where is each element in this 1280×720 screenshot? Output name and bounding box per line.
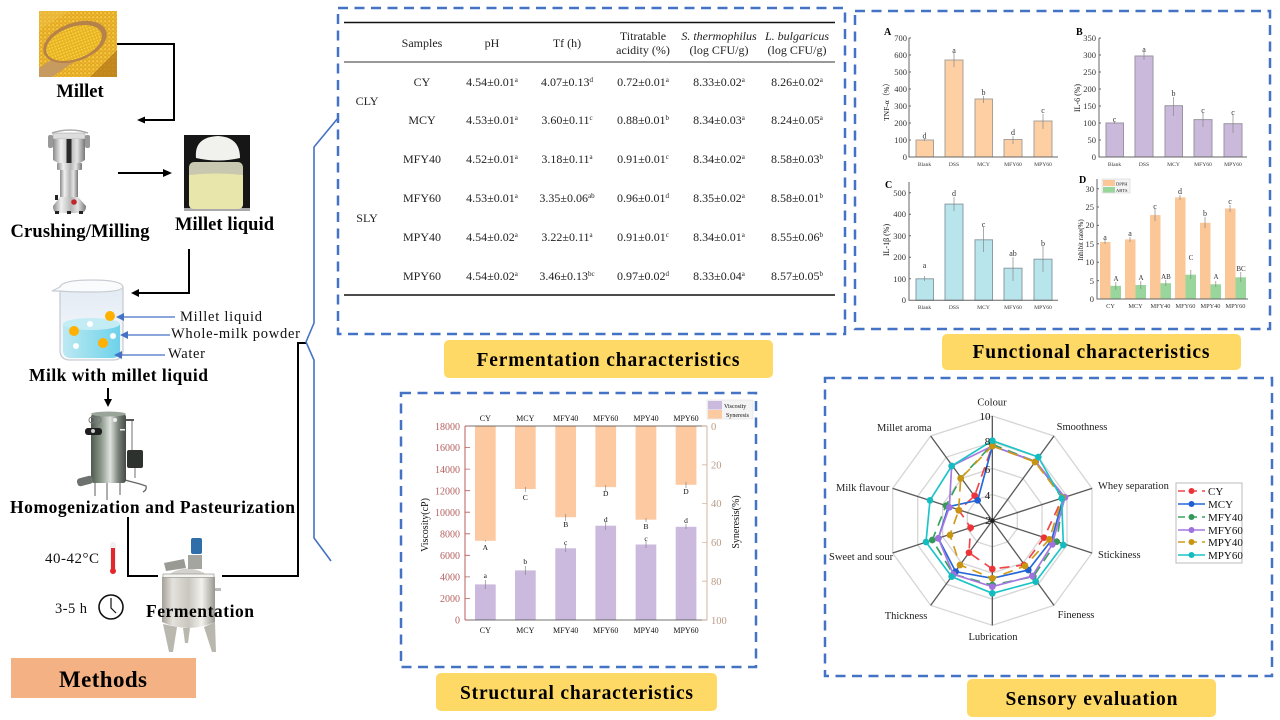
- chart C: IL-1 beta: MPY60: [1034, 305, 1052, 311]
- table body: 3.60±0.11: [541, 113, 590, 127]
- significance letters: D: [683, 487, 689, 496]
- table body: b: [666, 114, 670, 122]
- chart D: inhibit rate: d: [1178, 187, 1182, 196]
- significance letters: d: [684, 516, 688, 525]
- radar chart: [893, 416, 1092, 625]
- table body: a: [590, 153, 594, 161]
- chart C: IL-1 beta: 300: [893, 231, 906, 241]
- label: Crushing/Milling: Crushing/Milling: [10, 222, 150, 242]
- label: Homogenization and Pasteurization: Homogenization and Pasteurization: [10, 497, 295, 517]
- chart D legend: DPPH: [1116, 182, 1128, 186]
- arrow: milk to homogenizer: [104, 388, 112, 407]
- chart D: inhibit rate: a: [1128, 229, 1132, 238]
- radar scale numbers: 10: [980, 411, 991, 423]
- left axis labels: 16000: [435, 443, 460, 454]
- chart D: inhibit rate: 30: [1086, 184, 1094, 194]
- chart D: inhibit rate: c: [1153, 202, 1157, 211]
- heading: Sensory evaluation: [967, 679, 1216, 717]
- table body: SLY: [356, 211, 378, 225]
- radar axis labels: Stickiness: [1098, 550, 1141, 561]
- chart A: TNF-alpha: MCY: [977, 162, 990, 168]
- chart D: inhibit rate: BC: [1236, 265, 1246, 273]
- bars: syneresis: [475, 426, 696, 541]
- sample labels: MCY: [516, 626, 535, 635]
- table body: MFY60: [403, 191, 441, 205]
- table body: b: [820, 192, 824, 200]
- table body: b: [820, 231, 824, 239]
- chart D: inhibit rate: c: [1228, 197, 1232, 206]
- left axis labels: 4000: [440, 572, 460, 584]
- significance letters: [483, 487, 689, 580]
- left axis labels: 18000: [435, 422, 460, 433]
- table body: 4.54±0.02: [466, 269, 515, 283]
- table body: b: [820, 153, 824, 161]
- right axis labels: 20: [711, 460, 722, 472]
- radar scale numbers: 2: [985, 515, 991, 527]
- sample labels: CY: [480, 414, 491, 423]
- table body: c: [590, 114, 593, 122]
- chart C: IL-1 beta: C: [885, 180, 892, 191]
- table body: 0.97±0.02: [617, 269, 666, 283]
- icon: homogenizer and pasteurizer: [76, 412, 146, 500]
- chart D: inhibit rate: 10: [1086, 257, 1094, 267]
- chart C: IL-1 beta: MCY: [977, 305, 990, 311]
- icon: thermometer: [110, 542, 116, 574]
- chart B: IL-6: 100: [1083, 118, 1096, 128]
- table body: a: [742, 114, 746, 122]
- sample labels: MCY: [516, 414, 535, 423]
- radar axis labels: Millet aroma: [877, 423, 932, 434]
- chart D: inhibit rate: a: [1103, 233, 1107, 242]
- chart D: inhibit rate: A: [1138, 274, 1144, 282]
- chart A: TNF-alpha: d: [922, 132, 926, 140]
- significance letters: b: [523, 557, 527, 566]
- chart B: IL-6: 300: [1083, 50, 1096, 60]
- table body: 4.53±0.01: [466, 191, 515, 205]
- chart D: inhibit rate: b: [1203, 209, 1207, 218]
- heading: Sensory evaluation: Sensory evaluation: [1006, 689, 1178, 710]
- table body: 8.34±0.01: [693, 230, 742, 244]
- chart B: IL-6: DSS: [1139, 162, 1149, 168]
- table body: 3.22±0.11: [541, 230, 590, 244]
- table body: c: [666, 153, 669, 161]
- chart A: TNF-alpha: A: [884, 27, 892, 38]
- callouts: beaker ingredients: Millet liquid: [180, 309, 263, 325]
- radar legend: MFY60: [1208, 525, 1243, 537]
- chart B: IL-6: IL-6 (%): [1073, 84, 1082, 112]
- chart C: IL-1 beta: 400: [893, 209, 906, 219]
- right axis labels: 100: [711, 616, 727, 627]
- chart D: inhibit rate: A: [1213, 273, 1219, 281]
- chart D: inhibit rate: 0: [1090, 294, 1094, 304]
- significance letters: d: [604, 515, 608, 524]
- radar scale numbers: [980, 411, 991, 527]
- table body: MCY: [408, 113, 436, 127]
- table body: 0.72±0.01: [617, 75, 666, 89]
- callouts: beaker ingredients: Whole-milk powder: [171, 326, 300, 342]
- chart B: IL-6: 50: [1088, 135, 1096, 145]
- table body: MFY40: [403, 152, 441, 166]
- table body: 8.35±0.02: [693, 191, 742, 205]
- significance letters: a: [484, 571, 488, 580]
- sample labels: MFY60: [593, 414, 618, 423]
- chart B: IL-6: 250: [1083, 67, 1096, 77]
- chart D: inhibit rate: CY: [1106, 303, 1115, 310]
- chart D: inhibit rate: 15: [1086, 239, 1094, 249]
- table header: acidity (%): [616, 43, 670, 57]
- significance letters: C: [523, 493, 528, 502]
- chart B: IL-6: a: [1142, 45, 1146, 54]
- table header: [402, 29, 829, 57]
- table body: 4.52±0.01: [466, 152, 515, 166]
- radar axis labels: Thickness: [885, 611, 927, 622]
- chart legend: Syneresis: [726, 413, 750, 419]
- table body: a: [590, 231, 594, 239]
- chart B: IL-6: 0: [1092, 152, 1096, 162]
- radar axis labels: Sweet and sour: [829, 552, 894, 563]
- table body: 8.33±0.02: [693, 75, 742, 89]
- table body: c: [666, 231, 669, 239]
- chart A: TNF-alpha: MPY60: [1034, 162, 1052, 168]
- table body: [356, 75, 824, 283]
- table body: a: [515, 153, 519, 161]
- table body: 4.54±0.01: [466, 75, 515, 89]
- table body: a: [742, 76, 746, 84]
- chart legend: Viscosity: [724, 404, 746, 410]
- chart B: IL-6: b: [1172, 89, 1176, 98]
- table header: Samples: [402, 36, 443, 50]
- chart B: IL-6: Blank: [1108, 162, 1121, 168]
- table header: S. thermophilus: [681, 29, 757, 43]
- panel: sensory evaluation: [825, 378, 1272, 676]
- chart B: IL-6: [1073, 27, 1247, 168]
- label: time: 3-5 h: [55, 601, 88, 617]
- arrow: millet liquid to beaker: [131, 249, 189, 297]
- chart B: IL-6: MFY60: [1194, 162, 1212, 168]
- table body: 4.54±0.02: [466, 230, 515, 244]
- chart C: IL-1 beta: 200: [893, 252, 906, 262]
- left axis labels: [435, 422, 460, 626]
- label: Fermentation: Fermentation: [146, 601, 254, 621]
- chart D: inhibit rate: AB: [1161, 273, 1171, 281]
- callouts: beaker ingredients: [114, 309, 300, 362]
- chart B: IL-6: c: [1231, 108, 1235, 117]
- sample labels: [480, 414, 699, 635]
- chart A: TNF-alpha: a: [952, 46, 956, 55]
- left axis labels: 8000: [440, 530, 460, 540]
- table header: Titratable: [620, 29, 666, 43]
- sample labels: MPY40: [633, 626, 659, 635]
- chart D: inhibit rate: D: [1079, 175, 1086, 186]
- table body: 0.88±0.01: [617, 113, 666, 127]
- table header: L. bulgaricus: [764, 29, 829, 43]
- table body: a: [515, 231, 519, 239]
- table body: a: [515, 114, 519, 122]
- axes: [465, 426, 707, 620]
- table body: 8.58±0.03: [771, 152, 820, 166]
- chart A: TNF-alpha: DSS: [949, 162, 959, 168]
- table body: a: [515, 270, 519, 278]
- chart A: TNF-alpha: b: [982, 88, 986, 97]
- chart B: IL-6: 200: [1083, 84, 1096, 94]
- heading: Functional characteristics: [942, 334, 1241, 370]
- bracket: links methods to results: [306, 118, 338, 561]
- chart A: TNF-alpha: c: [1041, 106, 1045, 115]
- chart C: IL-1 beta: Blank: [918, 305, 931, 311]
- heading: Functional characteristics: Functional characteristics: [972, 342, 1210, 363]
- chart B: IL-6: MPY60: [1224, 162, 1242, 168]
- table body: 8.26±0.02: [771, 75, 820, 89]
- table body: a: [820, 76, 824, 84]
- series: MFY40: [932, 444, 1063, 585]
- table body: 8.55±0.06: [771, 230, 820, 244]
- table body: 4.53±0.01: [466, 113, 515, 127]
- table body: 8.34±0.03: [693, 113, 742, 127]
- radar scale numbers: 8: [985, 436, 991, 448]
- chart A: TNF-alpha: TNF-α（%）: [882, 79, 891, 121]
- label: Milk with millet liquid: Milk with millet liquid: [29, 365, 208, 385]
- table header: (log CFU/g): [767, 43, 827, 57]
- chart C: IL-1 beta: ab: [1009, 249, 1017, 258]
- radar axis labels: Colour: [977, 398, 1007, 408]
- table body: 3.35±0.06: [539, 191, 588, 205]
- chart A: TNF-alpha: 400: [894, 84, 907, 94]
- table body: a: [666, 76, 670, 84]
- sample labels: MPY60: [673, 626, 699, 635]
- line: fermentation to results: [222, 343, 307, 576]
- significance letters: c: [644, 534, 648, 543]
- arrow: crushing to millet liquid: [118, 169, 172, 177]
- sample labels: MFY40: [553, 626, 578, 635]
- chart D: inhibit rate: MPY60: [1226, 303, 1245, 310]
- chart A: TNF-alpha: 700: [894, 33, 907, 43]
- right axis title: Syneresis(%): [731, 495, 742, 549]
- table body: 3.18±0.11: [541, 152, 590, 166]
- icon: beaker with ingredients: [52, 280, 123, 360]
- series: MCY: [938, 446, 1063, 578]
- table body: CY: [414, 75, 431, 89]
- left axis labels: 0: [455, 616, 460, 626]
- radar legend: [1176, 483, 1243, 563]
- chart D: inhibit rate: 25: [1086, 202, 1094, 212]
- heading: Structural characteristics: [436, 673, 717, 711]
- right axis labels: [711, 422, 727, 627]
- right axis labels: 60: [711, 538, 722, 549]
- icon: fermentation tank: [162, 538, 221, 652]
- table body: b: [820, 270, 824, 278]
- panel: methods flow: [10, 11, 307, 698]
- arrow: millet to crushing: [117, 44, 174, 124]
- table body: ab: [588, 192, 595, 200]
- left axis labels: 10000: [435, 508, 460, 519]
- chart D: inhibit rate: A: [1113, 275, 1119, 283]
- chart C: IL-1 beta: MFY60: [1004, 305, 1022, 311]
- sample labels: MPY40: [633, 414, 659, 423]
- chart A: TNF-alpha: 0: [903, 152, 907, 162]
- chart A: TNF-alpha: 500: [894, 67, 907, 77]
- table header: Tf (h): [553, 36, 581, 50]
- series: MPY60: [926, 441, 1063, 593]
- sample labels: CY: [480, 626, 491, 635]
- heading: Methods: [11, 658, 196, 698]
- radar legend: MPY60: [1208, 550, 1243, 562]
- icon: milling machine: [48, 130, 90, 214]
- chart B: IL-6: MCY: [1167, 162, 1180, 168]
- significance letters: B: [563, 520, 568, 529]
- radar legend: MPY40: [1208, 537, 1243, 549]
- chart B: IL-6: B: [1076, 27, 1083, 38]
- radar legend: CY: [1208, 486, 1223, 498]
- sample labels: MFY60: [593, 626, 618, 635]
- chart D: inhibit rate: [1077, 175, 1248, 310]
- panel: structural characteristics: [401, 393, 756, 667]
- chart D: inhibit rate: C: [1189, 254, 1194, 262]
- heading: Fermentation characteristics: [444, 340, 773, 378]
- table body: 8.58±0.01: [771, 191, 820, 205]
- heading: Methods: Methods: [59, 667, 147, 692]
- axis titles: Viscosity(cP): [420, 498, 431, 552]
- left axis labels: 12000: [435, 486, 460, 498]
- right axis labels: 80: [711, 577, 722, 588]
- chart A: TNF-alpha: 200: [894, 118, 907, 128]
- chart C: IL-1 beta: DSS: [949, 305, 959, 311]
- table body: a: [742, 231, 746, 239]
- left axis labels: 2000: [440, 594, 460, 605]
- right axis labels: 0: [711, 422, 716, 433]
- chart legend: [707, 400, 753, 419]
- table body: d: [590, 76, 594, 84]
- table body: 3.46±0.13: [539, 269, 588, 283]
- table body: 8.34±0.02: [693, 152, 742, 166]
- chart A: TNF-alpha: MFY60: [1004, 162, 1022, 168]
- label: Millet: Millet: [56, 82, 104, 102]
- series: MPY40: [950, 446, 1062, 578]
- radar axis labels: Smoothness: [1057, 422, 1107, 433]
- radar axis labels: Whey separation: [1098, 481, 1170, 492]
- chart D: inhibit rate: Inhibit rate(%): [1077, 219, 1085, 261]
- chart B: IL-6: c: [1113, 115, 1117, 124]
- left axis labels: 6000: [440, 551, 460, 562]
- chart B: IL-6: 350: [1083, 33, 1096, 43]
- significance letters: A: [483, 543, 489, 552]
- bars: viscosity: [475, 526, 696, 620]
- label: Millet liquid heading: Millet liquid: [175, 215, 275, 235]
- chart B: IL-6: c: [1201, 106, 1205, 115]
- chart D legend: ABTS: [1116, 188, 1128, 193]
- panel: fermentation table: [338, 8, 845, 334]
- chart D: inhibit rate: MFY60: [1176, 303, 1195, 310]
- chart D: inhibit rate: MFY40: [1151, 303, 1170, 310]
- arrow: homogenizer to fermentation: [128, 517, 158, 576]
- series: MFY60: [938, 446, 1065, 587]
- chart A: TNF-alpha: 300: [894, 101, 907, 111]
- significance letters: B: [643, 522, 649, 531]
- table body: CLY: [356, 94, 379, 108]
- chart D: inhibit rate: MCY: [1128, 303, 1143, 310]
- table body: bc: [588, 270, 595, 278]
- callouts: beaker ingredients: Water: [168, 346, 205, 362]
- chart A: TNF-alpha: [882, 27, 1058, 168]
- table body: a: [515, 192, 519, 200]
- significance letters: c: [564, 538, 568, 547]
- icon: clock: [99, 595, 123, 619]
- table body: 0.91±0.01: [617, 230, 666, 244]
- table header: (log CFU/g): [689, 43, 749, 57]
- chart C: IL-1 beta: 100: [893, 274, 906, 284]
- chart B: IL-6: 150: [1083, 101, 1096, 111]
- chart C: IL-1 beta: IL-1β (%): [882, 224, 891, 256]
- table body: MPY40: [403, 230, 441, 244]
- table body: a: [820, 114, 824, 122]
- radar axis labels: [829, 398, 1170, 643]
- chart C: IL-1 beta: 0: [902, 295, 906, 305]
- table header: pH: [485, 36, 500, 50]
- radar legend: MFY40: [1208, 512, 1243, 524]
- chart A: TNF-alpha: d: [1011, 128, 1015, 137]
- table body: 0.91±0.01: [617, 152, 666, 166]
- table body: 4.07±0.13: [541, 75, 590, 89]
- table body: 8.57±0.05: [771, 269, 820, 283]
- radar scale numbers: 4: [985, 490, 991, 502]
- chart D legend: [1102, 179, 1130, 193]
- radar scale numbers: 6: [985, 464, 991, 476]
- chart C: IL-1 beta: [882, 180, 1058, 311]
- left axis labels: 14000: [435, 465, 460, 476]
- radar axis labels: Lubrication: [969, 632, 1018, 643]
- significance letters: D: [603, 489, 609, 498]
- chart A: TNF-alpha: 600: [894, 50, 907, 60]
- chart C: IL-1 beta: c: [982, 220, 986, 229]
- table body: 0.96±0.01: [617, 191, 666, 205]
- table body: a: [515, 76, 519, 84]
- chart C: IL-1 beta: 500: [893, 188, 906, 198]
- chart D: inhibit rate: MPY40: [1201, 303, 1220, 310]
- radar axis labels: Milk flavour: [836, 483, 890, 494]
- image: millet in a wooden spoon: [37, 11, 117, 77]
- chart C: IL-1 beta: b: [1041, 239, 1045, 248]
- panel: functional characteristics: [855, 11, 1270, 329]
- heading: Fermentation characteristics: Fermentation characteristics: [476, 350, 740, 371]
- image: jar of millet liquid: [184, 135, 250, 211]
- chart A: TNF-alpha: 100: [894, 135, 907, 145]
- table body: 8.24±0.05: [771, 113, 820, 127]
- right axis labels: 40: [711, 499, 722, 510]
- chart D: inhibit rate: 5: [1090, 276, 1094, 286]
- chart A: TNF-alpha: Blank: [918, 162, 931, 168]
- table body: d: [666, 192, 670, 200]
- chart C: IL-1 beta: a: [923, 261, 927, 270]
- table body: d: [666, 270, 670, 278]
- sample labels: MPY60: [673, 414, 699, 423]
- radar axis labels: Fineness: [1058, 610, 1094, 621]
- heading: Structural characteristics: Structural characteristics: [460, 683, 693, 704]
- table body: a: [742, 192, 746, 200]
- chart D: inhibit rate: 20: [1086, 220, 1094, 230]
- chart C: IL-1 beta: d: [952, 189, 956, 198]
- series: CY: [959, 446, 1062, 569]
- table body: 8.33±0.04: [693, 269, 742, 283]
- table body: a: [742, 270, 746, 278]
- table body: MPY60: [403, 269, 441, 283]
- radar legend: MCY: [1208, 499, 1233, 511]
- label: temperature: 40-42°C: [45, 551, 99, 567]
- table body: a: [742, 153, 746, 161]
- sample labels: MFY40: [553, 414, 578, 423]
